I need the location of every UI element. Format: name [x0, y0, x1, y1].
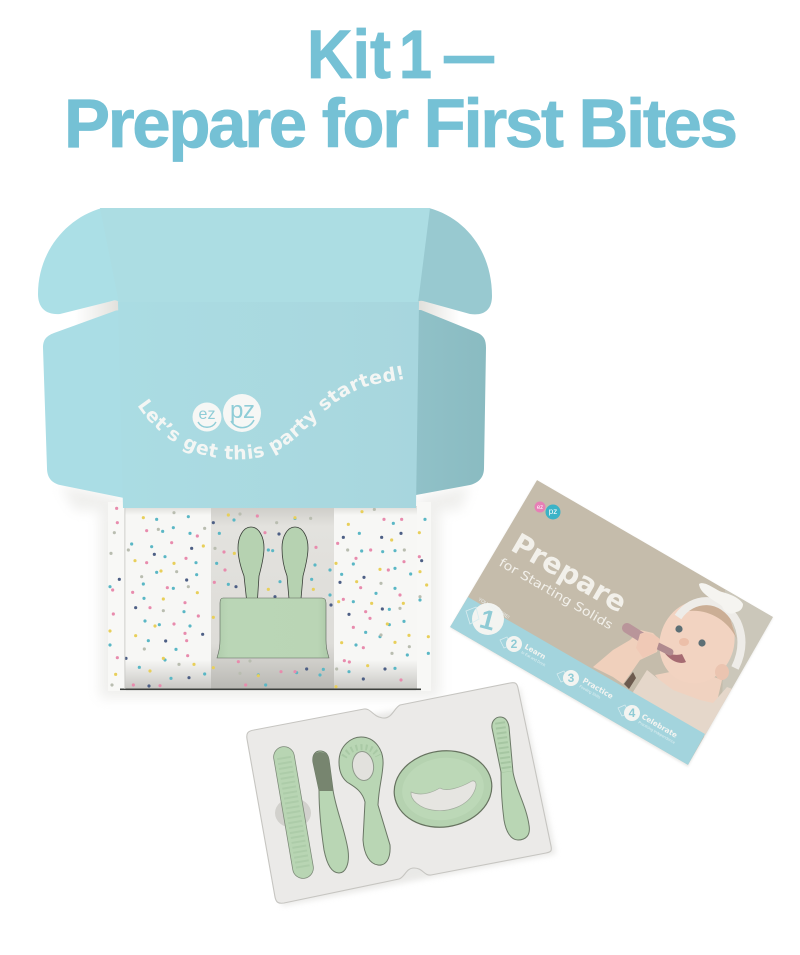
step 2	[500, 636, 547, 668]
plate inner	[398, 753, 488, 825]
texture	[284, 757, 303, 868]
plate rim	[389, 745, 497, 833]
subtitle: for Starting Solids	[497, 555, 615, 632]
box shadow	[60, 485, 470, 698]
texture	[344, 747, 378, 757]
side flap right	[416, 502, 431, 691]
right panel	[334, 506, 417, 689]
slogan baseline	[137, 377, 412, 459]
step 2: Learn	[523, 642, 547, 661]
photo backdrop	[722, 589, 773, 708]
spoon body	[339, 737, 390, 865]
eyes	[675, 625, 706, 647]
step 1: 1	[477, 604, 499, 636]
lid curved slogan: Let’s get this party started!	[138, 366, 403, 460]
lid lower right flap	[416, 310, 486, 495]
panel seam left	[124, 506, 126, 689]
tray shadow	[252, 688, 556, 906]
head	[660, 604, 734, 677]
title	[64, 16, 738, 162]
spoons and cup	[217, 527, 329, 658]
tool 5 spreader	[492, 717, 529, 840]
box interior	[108, 502, 431, 691]
instruction card	[450, 480, 773, 767]
headband	[678, 601, 741, 668]
centre compartment	[211, 508, 334, 689]
confetti dots	[110, 508, 428, 687]
step 4: 4	[629, 706, 636, 720]
teether bulb	[627, 628, 646, 640]
ear	[715, 664, 729, 680]
hair	[689, 605, 736, 638]
lid upper left flap	[38, 208, 119, 314]
title word Kit: Kit	[307, 16, 391, 93]
card logo: ez	[537, 505, 543, 511]
lid lower left flap	[43, 310, 124, 498]
step 2: 2	[511, 637, 518, 651]
outline	[284, 757, 303, 868]
green cup	[217, 598, 329, 658]
fingers	[638, 633, 660, 650]
smile cutout	[411, 781, 476, 811]
ezpz logo	[192, 394, 261, 432]
step 3: 3	[568, 671, 575, 685]
foam tray with feeding tools	[247, 683, 556, 906]
chest	[655, 672, 722, 703]
open mailer box	[38, 208, 492, 699]
step 1	[466, 597, 510, 636]
bow	[699, 583, 743, 614]
lid main panel	[118, 302, 419, 508]
step 3	[557, 670, 615, 701]
brush body	[313, 751, 348, 873]
Prepare: Prepare	[506, 527, 633, 619]
card logo: pz	[549, 507, 557, 516]
step 1: YOU ARE HERE!	[477, 597, 510, 620]
step 4: Practicing Independence	[638, 720, 676, 745]
teether stem	[656, 642, 674, 656]
step 4	[618, 705, 679, 745]
title dash: —	[444, 16, 494, 93]
tool 1 handle	[275, 757, 311, 868]
step 2: to Eat and Drink	[520, 650, 546, 668]
tool 4 plate	[389, 745, 497, 833]
right spoon	[282, 527, 308, 599]
arm	[593, 630, 660, 684]
lid top panel	[100, 208, 430, 303]
dress	[633, 670, 735, 738]
card headline	[497, 526, 633, 632]
spreader body	[492, 717, 529, 840]
left spoon	[238, 527, 264, 599]
recess	[275, 798, 311, 828]
card shadow	[450, 481, 773, 767]
nose	[679, 638, 689, 646]
body	[284, 757, 303, 868]
spoon hole	[351, 750, 375, 782]
blue strip	[450, 597, 705, 765]
notch gap right	[416, 299, 482, 337]
step 3: Practice	[581, 676, 615, 701]
card artwork	[450, 480, 773, 765]
card background	[450, 480, 773, 765]
bristles	[313, 752, 333, 791]
tool 3 spoon	[339, 737, 390, 865]
mouth	[665, 654, 686, 663]
notch gap left	[50, 299, 122, 337]
left panel	[125, 506, 211, 689]
tray	[247, 683, 551, 903]
underarm shadow	[624, 672, 636, 689]
bottom edge	[120, 688, 421, 690]
logo pz face: pz	[230, 397, 255, 424]
title line 2: Prepare for First Bites	[64, 85, 738, 162]
baby photo	[593, 583, 746, 738]
logo ez face: ez	[199, 406, 215, 423]
side flap left	[108, 502, 126, 691]
card logo	[534, 502, 560, 520]
texture	[500, 722, 507, 772]
lid upper right flap	[417, 208, 492, 314]
step 3: Feeding Skills	[578, 684, 601, 700]
title number 1: 1	[399, 16, 432, 93]
step 4: Celebrate	[640, 712, 679, 740]
lid	[38, 208, 492, 508]
tool 2 brush	[313, 751, 348, 873]
